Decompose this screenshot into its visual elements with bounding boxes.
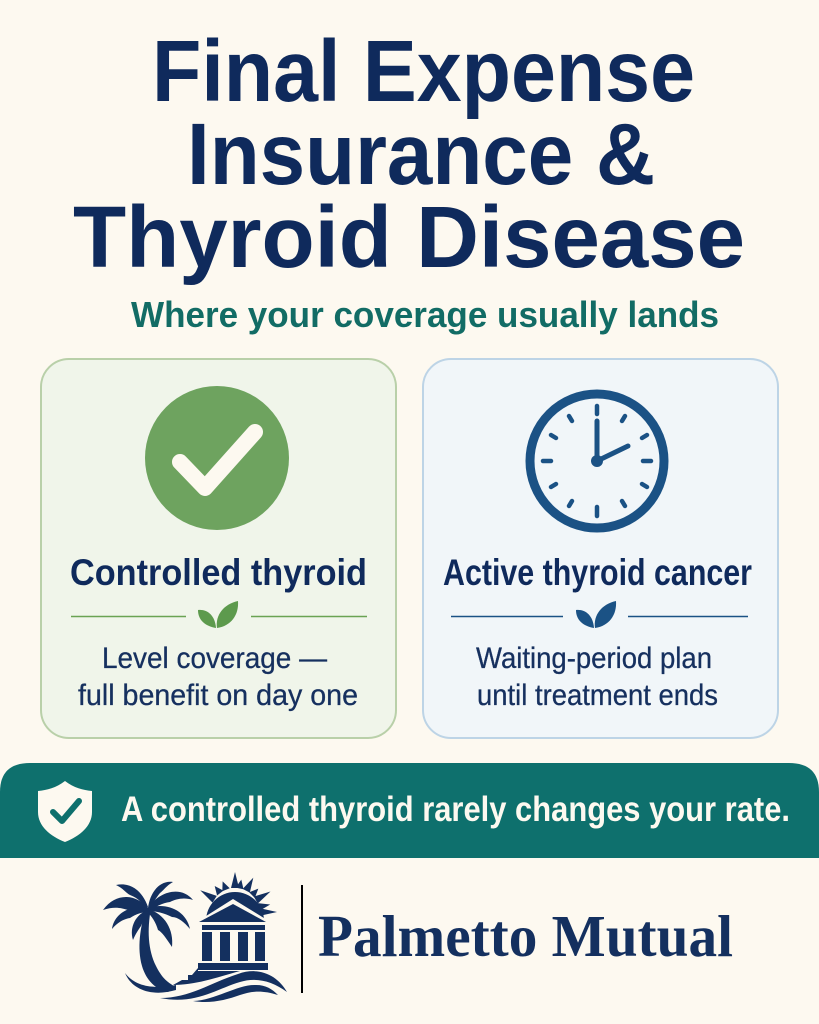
title bbox=[73, 23, 745, 286]
heading: active thyroid cancer: Active thyroid cancer bbox=[443, 552, 752, 593]
logo: Palmetto Mutual bbox=[103, 872, 287, 1002]
icon: waves bbox=[160, 971, 287, 1002]
body text: controlled thyroid: full benefit on day one bbox=[78, 679, 358, 712]
title: Final Expense bbox=[152, 23, 695, 120]
title: Thyroid Disease bbox=[73, 189, 745, 286]
divider with leaf bbox=[71, 601, 367, 628]
divider bbox=[301, 885, 303, 993]
icon: temple bbox=[173, 899, 272, 985]
panel: active thyroid cancer bbox=[423, 359, 778, 738]
body text: controlled thyroid: Level coverage — bbox=[102, 642, 327, 675]
body text: active thyroid cancer: until treatment ends bbox=[477, 679, 718, 712]
icon: clock bbox=[530, 394, 664, 528]
divider with leaf bbox=[451, 601, 748, 628]
body text: active thyroid cancer: Waiting-period plan bbox=[476, 642, 712, 675]
banner bbox=[0, 763, 819, 858]
wordmark: Palmetto Mutual bbox=[318, 903, 733, 969]
icon: green check bbox=[145, 386, 289, 530]
subtitle: Where your coverage usually lands bbox=[131, 294, 719, 335]
body text: controlled thyroid bbox=[78, 642, 358, 712]
title: Insurance & bbox=[187, 106, 655, 203]
heading: controlled thyroid: Controlled thyroid bbox=[70, 552, 367, 593]
panel: controlled thyroid bbox=[41, 359, 396, 738]
icon: palm tree bbox=[103, 882, 193, 993]
icon: sun bbox=[198, 872, 277, 921]
body text: active thyroid cancer bbox=[476, 642, 718, 712]
icon: shield check bbox=[38, 781, 92, 842]
